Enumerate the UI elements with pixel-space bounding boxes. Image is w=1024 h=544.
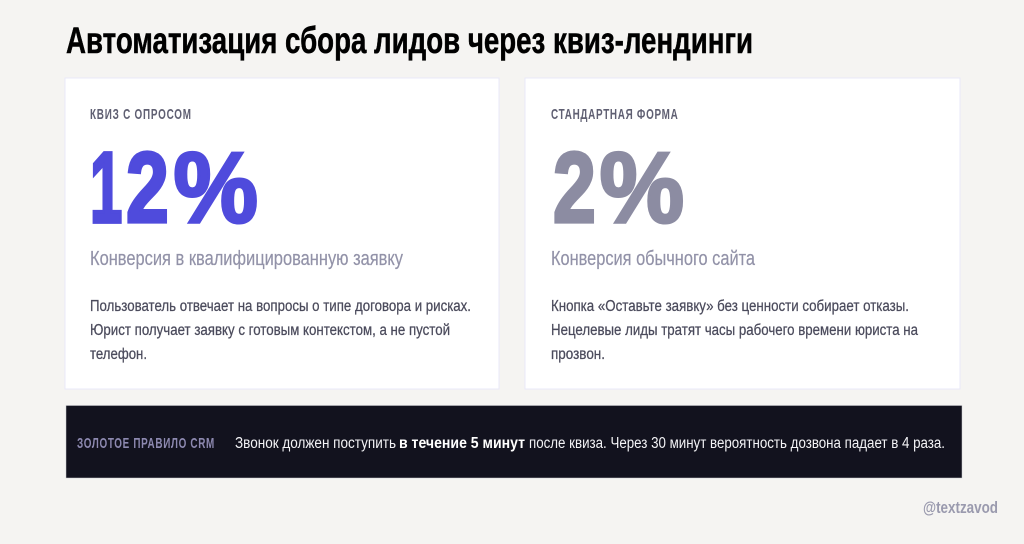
callout label: ЗОЛОТОЕ ПРАВИЛО CRM	[77, 435, 214, 452]
description text: Пользователь отвечает на вопросы о типе договора и рисках.	[90, 298, 471, 315]
panel: standard form	[525, 78, 960, 389]
big number: 12%: 2	[126, 131, 169, 243]
big number: 2%	[553, 131, 684, 244]
watermark: @textzavod	[923, 498, 998, 517]
big number: 12%: 1	[90, 133, 122, 244]
callout text	[235, 435, 945, 452]
big number: 12%	[90, 131, 258, 244]
big number: 2%: %	[600, 132, 684, 244]
panel label: КВИЗ С ОПРОСОМ	[90, 106, 191, 123]
subtitle: Конверсия обычного сайта	[551, 248, 756, 270]
big number: 12%: %	[174, 132, 258, 244]
description text: Кнопка «Оставьте заявку» без ценности собирает отказы.	[551, 298, 909, 315]
callout text: Звонок должен поступить	[235, 435, 396, 452]
description text: Юрист получает заявку с готовым контекстом, а не пустой	[90, 322, 450, 339]
callout: golden rule	[66, 406, 962, 478]
title: Автоматизация сбора лидов через квиз-лендинги	[66, 20, 753, 61]
panel label: СТАНДАРТНАЯ ФОРМА	[551, 106, 678, 123]
callout text: в течение 5 минут	[399, 435, 525, 452]
description text: телефон.	[90, 346, 147, 363]
description text	[551, 298, 918, 363]
subtitle: Конверсия в квалифицированную заявку	[90, 248, 403, 270]
callout text: после квиза. Через 30 минут вероятность дозвона падает в 4 раза.	[529, 435, 945, 452]
description text: прозвон.	[551, 346, 605, 363]
description text	[90, 298, 471, 363]
big number: 2%: 2	[553, 131, 596, 243]
description text: Нецелевые лиды тратят часы рабочего времени юриста на	[551, 322, 918, 339]
panel: quiz with survey	[65, 78, 499, 389]
